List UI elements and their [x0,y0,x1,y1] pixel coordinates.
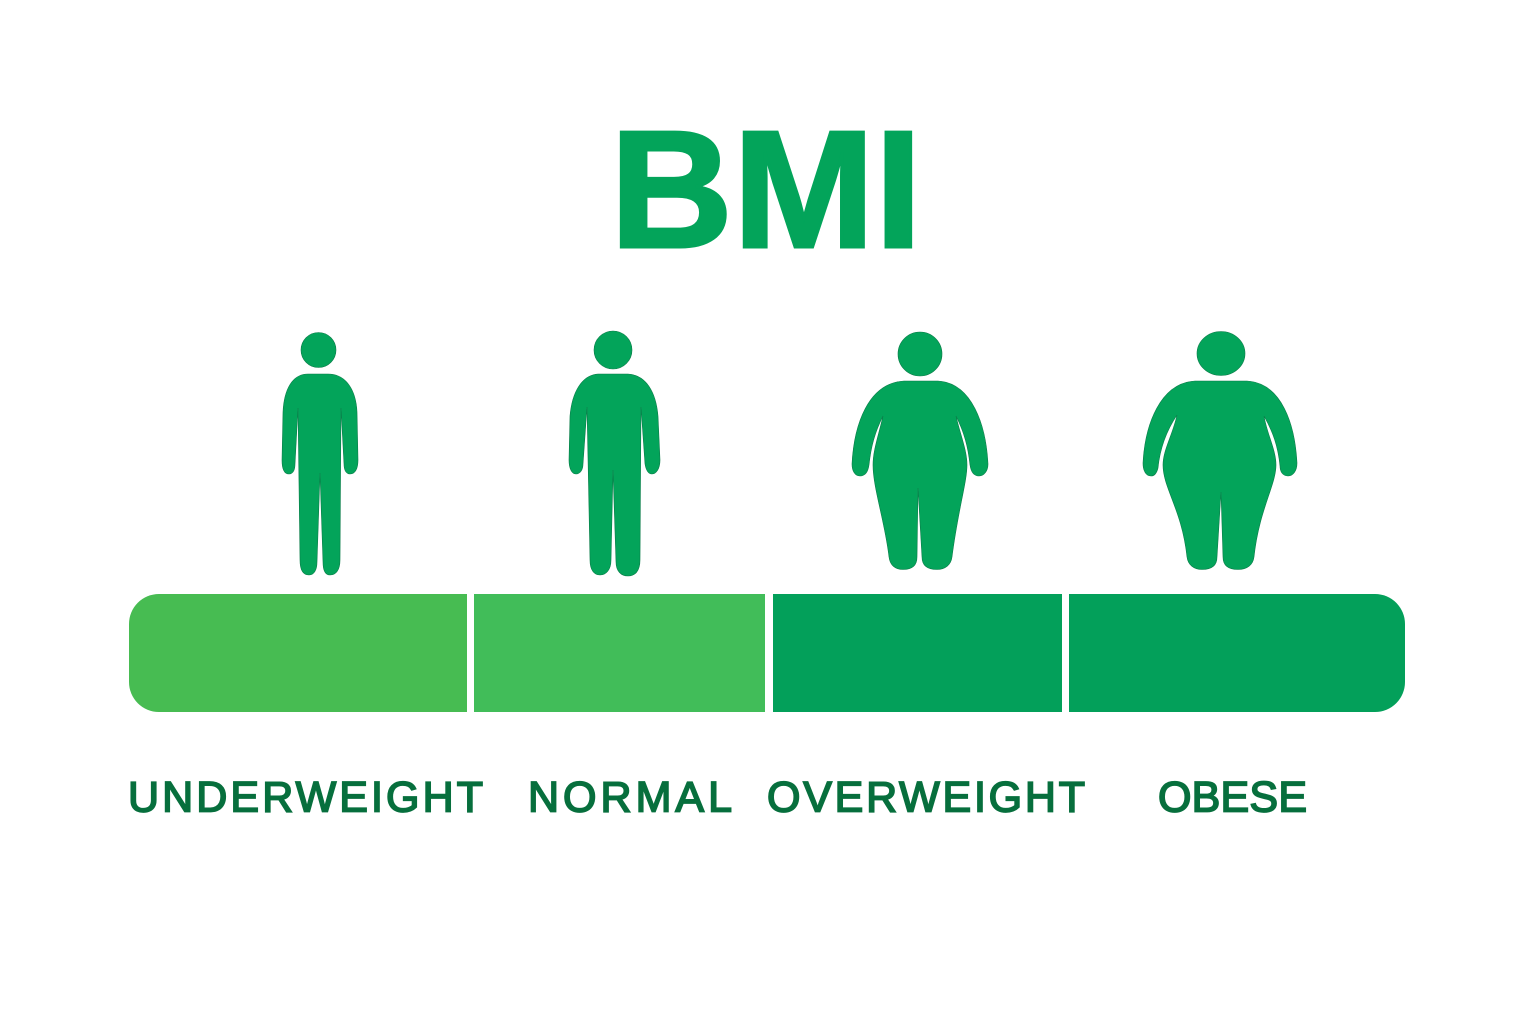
category labels [128,774,1307,822]
label: overweight: OVERWEIGHT [767,774,1085,822]
icon: overweight person [852,332,988,570]
segment: underweight [129,594,467,712]
segment: obese [1069,594,1405,712]
label: obese: OBESE [1158,774,1307,822]
icon: obese person [1143,332,1297,570]
label: underweight: UNDERWEIGHT [128,774,483,822]
segment: overweight [773,594,1062,712]
segment: normal [474,594,765,712]
icon: underweight person [282,332,358,575]
figures row [282,331,1297,576]
title: BMI [610,97,922,283]
label: normal: NORMAL [528,774,732,822]
BMI scale bar [129,594,1405,712]
icon: normal person [569,331,660,576]
